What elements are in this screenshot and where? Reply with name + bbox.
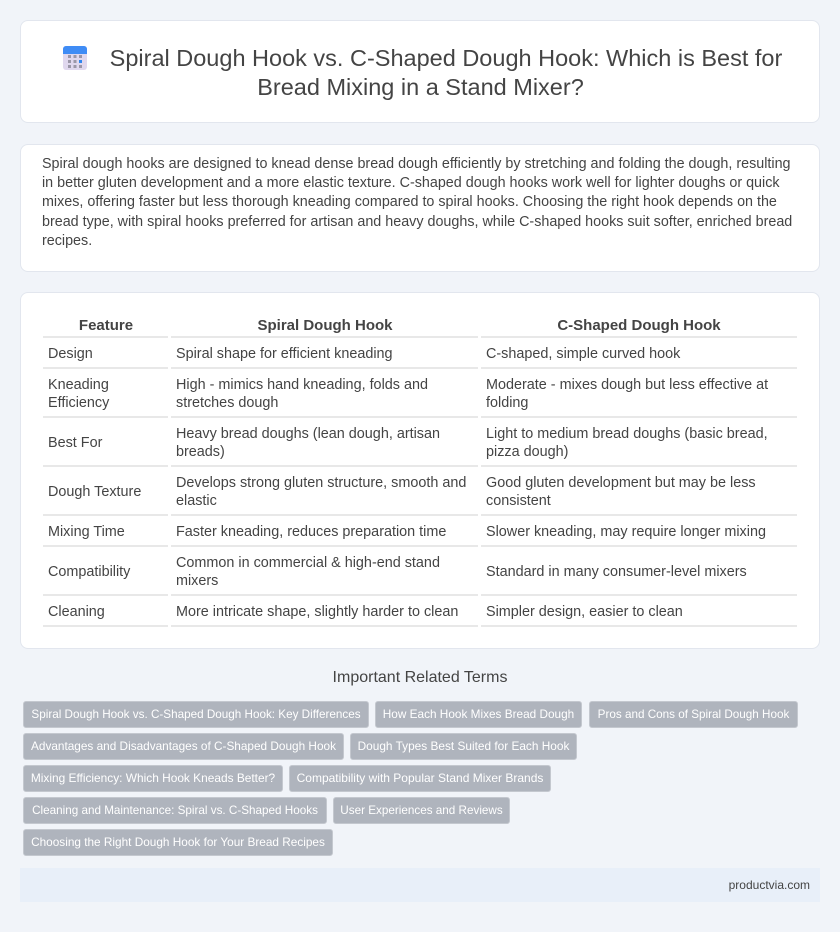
cell: Common in commercial & high-end stand [176, 555, 440, 571]
tag [23, 829, 333, 856]
text block: intro paragraph [42, 156, 792, 249]
row: design: Design [48, 346, 93, 362]
cell: breads) [176, 444, 225, 460]
text block: intro paragraph: mixes, offering faster but less thorough kneading compared to spiral hooks. Choosing the right hook depends on the [42, 194, 777, 210]
cell: Heavy bread doughs (lean dough, artisan [176, 426, 440, 442]
cell: consistent [486, 493, 551, 509]
cell: Slower kneading, may require longer mixing [486, 524, 766, 540]
row: dough texture: Dough Texture [48, 484, 141, 500]
heading: important related terms: Important Related Terms [333, 669, 507, 686]
cell [486, 426, 768, 460]
tag: User Experiences and Reviews [340, 804, 503, 817]
tag: Cleaning and Maintenance: Spiral vs. C-Shaped Hooks [32, 804, 318, 817]
cell [176, 426, 440, 460]
tag: Mixing Efficiency: Which Hook Kneads Better? [31, 771, 275, 785]
row: best for: Best For [48, 435, 102, 451]
title: Spiral Dough Hook vs. C-Shaped Dough Hook: Which is Best for [110, 45, 782, 71]
row: kneading efficiency: Efficiency [48, 395, 109, 411]
cell: Moderate - mixes dough but less effective at [486, 377, 768, 393]
tag: Advantages and Disadvantages of C-Shaped Dough Hook [31, 739, 336, 753]
text block: intro paragraph: in better gluten development and a more elastic texture. C-shaped dough hooks work well for lighter doughs or quick [42, 175, 780, 191]
table header: c-shaped dough hook: C-Shaped Dough Hook [557, 317, 721, 334]
cell: Develops strong gluten structure, smooth and [176, 475, 466, 491]
cell: C-shaped, simple curved hook [486, 346, 680, 362]
text block: intro paragraph: Spiral dough hooks are designed to knead dense bread dough efficiently by stretching and folding the dough, resulting [42, 156, 791, 172]
tag [23, 701, 369, 728]
row: kneading efficiency: Kneading [48, 377, 109, 393]
row: cleaning: Cleaning [48, 604, 105, 620]
tag: Dough Types Best Suited for Each Hook [358, 739, 569, 753]
cell [176, 555, 440, 589]
cell: More intricate shape, slightly harder to clean [176, 604, 458, 620]
panel: intro paragraph [20, 144, 820, 272]
cell: pizza dough) [486, 444, 568, 460]
tag [589, 701, 798, 728]
cell: High - mimics hand kneading, folds and [176, 377, 428, 393]
title line 2: Bread Mixing in a Stand Mixer? [257, 74, 584, 100]
tag [375, 701, 582, 728]
cell: Simpler design, easier to clean [486, 604, 683, 620]
cell: Spiral shape for efficient kneading [176, 346, 393, 362]
cell: Good gluten development but may be less [486, 475, 756, 491]
tag: Compatibility with Popular Stand Mixer Brands [297, 771, 543, 785]
tag: Pros and Cons of Spiral Dough Hook [598, 708, 789, 721]
cell [176, 377, 428, 411]
tag: Choosing the Right Dough Hook for Your Bread Recipes [31, 835, 325, 849]
tag: How Each Hook Mixes Bread Dough [383, 707, 574, 721]
footer text: productvia.com [729, 878, 810, 892]
cell: Faster kneading, reduces preparation time [176, 524, 446, 540]
tag [23, 797, 327, 824]
cell [486, 377, 768, 411]
row: compatibility: Compatibility [48, 564, 130, 580]
tag [350, 733, 577, 760]
icon: calendar grid [63, 46, 87, 70]
row: kneading efficiency [48, 377, 110, 411]
panel: comparison table [20, 292, 820, 649]
tag [289, 765, 551, 792]
tag [23, 765, 283, 792]
cell: elastic [176, 493, 217, 509]
row: mixing time: Mixing Time [48, 524, 125, 540]
cell: Standard in many consumer-level mixers [486, 564, 747, 580]
cell: stretches dough [176, 395, 278, 411]
cell [176, 475, 466, 509]
panel: title card [20, 20, 820, 123]
tag: Spiral Dough Hook vs. C-Shaped Dough Hook: Key Differences [31, 708, 361, 721]
footer bar [20, 868, 820, 902]
cell: mixers [176, 573, 218, 589]
text block: intro paragraph: bread type, with spiral hooks preferred for artisan and heavy doughs, while C-shaped hooks suit softer, enriched bread [42, 214, 792, 230]
cell: Light to medium bread doughs (basic bread, [486, 426, 768, 442]
table header: feature: Feature [79, 317, 133, 334]
tag [23, 733, 344, 760]
tag [333, 797, 510, 824]
cell: folding [486, 395, 528, 411]
table header: spiral dough hook: Spiral Dough Hook [258, 317, 392, 334]
cell [486, 475, 756, 509]
text block: intro paragraph: recipes. [42, 233, 92, 249]
